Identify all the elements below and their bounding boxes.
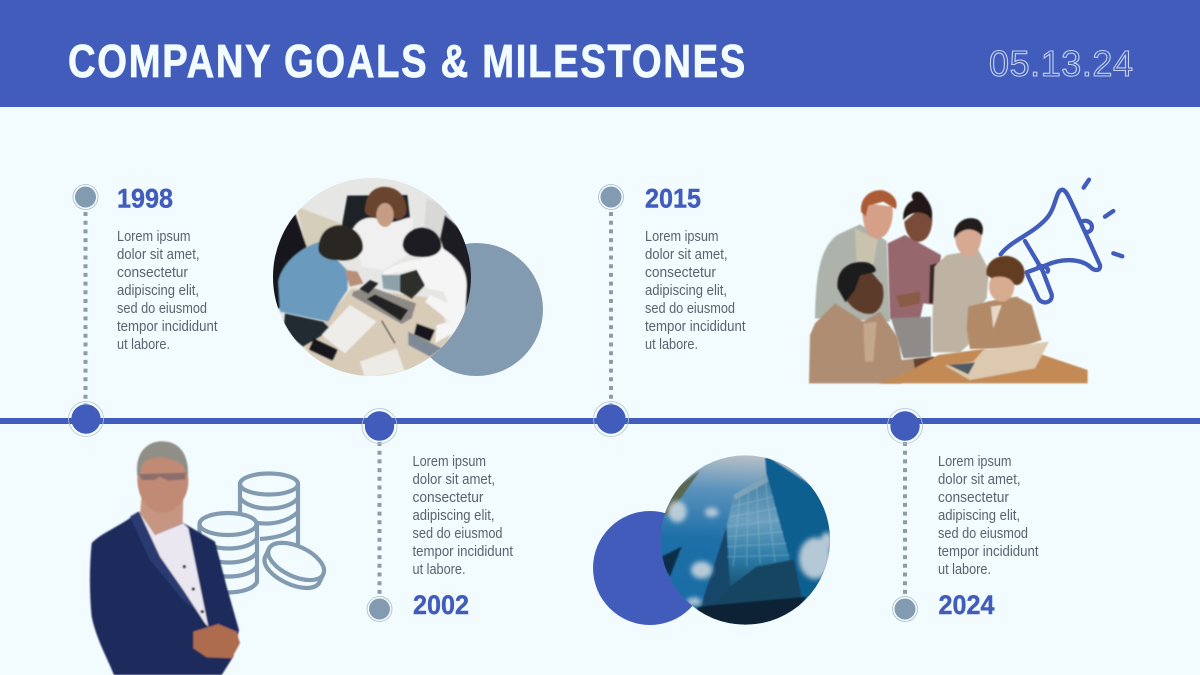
text block 2024: sed do eiusmod [938, 525, 1028, 542]
text block 2015: Lorem ipsum [645, 228, 718, 245]
text block 2015: ut labore. [645, 336, 698, 353]
year 2015: 2015 [645, 184, 701, 214]
table and laptop [878, 342, 1088, 383]
person: curly-haired woman [967, 256, 1042, 349]
text block 2002: adipiscing elit, [412, 507, 494, 524]
text block 1998: sed do eiusmod [117, 300, 207, 317]
text block 2015: sed do eiusmod [645, 300, 735, 317]
milestone 1998 connector [68, 184, 104, 436]
text block 1998: ut labore. [117, 336, 170, 353]
text block 2002: consectetur [412, 489, 484, 506]
text block 1998: consectetur [117, 264, 188, 281]
icon: coin stacks [200, 474, 330, 595]
header band [0, 0, 1200, 107]
text block 2015: tempor incididunt [645, 318, 746, 335]
text block 1998: tempor incididunt [117, 318, 218, 335]
title: COMPANY GOALS & MILESTONES [68, 36, 745, 87]
text block 2002: ut labore. [412, 561, 466, 578]
icon: megaphone [1001, 180, 1122, 302]
text block 1998: adipiscing elit, [117, 282, 199, 299]
text block 2024: dolor sit amet, [938, 471, 1020, 488]
milestone 2024 connector [888, 408, 922, 622]
text block 2024: adipiscing elit, [938, 507, 1020, 524]
text block 1998: Lorem ipsum [117, 228, 190, 245]
text block 2015: adipiscing elit, [645, 282, 727, 299]
person: man in tan blazer [809, 262, 945, 383]
milestone 2015 connector [594, 184, 628, 436]
person: woman in beige sweater [932, 218, 989, 352]
text block 2015: consectetur [645, 264, 716, 281]
text block 2024: tempor incididunt [938, 543, 1039, 560]
decorative blue circle [593, 511, 707, 625]
text block 2002 [412, 453, 514, 578]
year 1998: 1998 [117, 184, 173, 214]
person: woman in mauve sweater [888, 192, 941, 358]
photo: team around a table [270, 178, 473, 378]
timeline axis [0, 418, 1200, 424]
milestone 2002 connector [362, 408, 397, 622]
text block 2002: sed do eiusmod [412, 525, 502, 542]
person: red-haired man [815, 190, 897, 322]
text block 1998: dolor sit amet, [117, 246, 200, 263]
text block 2002: Lorem ipsum [412, 453, 486, 470]
decorative grey circle [410, 243, 543, 376]
text block 2024: consectetur [938, 489, 1009, 506]
date: 05.13.24 [989, 43, 1133, 84]
text block 2024: Lorem ipsum [938, 453, 1012, 470]
photo: glass skyscraper [661, 455, 833, 630]
text block 2015 [645, 228, 746, 353]
text block 2015: dolor sit amet, [645, 246, 728, 263]
year 2002: 2002 [413, 590, 469, 620]
photo: team at laptop [809, 190, 1088, 383]
text block 2024 [938, 453, 1039, 578]
text block 2024: ut labore. [938, 561, 991, 578]
text block 1998 [117, 228, 218, 353]
text block 2002: dolor sit amet, [412, 471, 495, 488]
photo: man in navy suit [90, 441, 240, 675]
text block 2002: tempor incididunt [412, 543, 514, 560]
year 2024: 2024 [938, 590, 994, 620]
